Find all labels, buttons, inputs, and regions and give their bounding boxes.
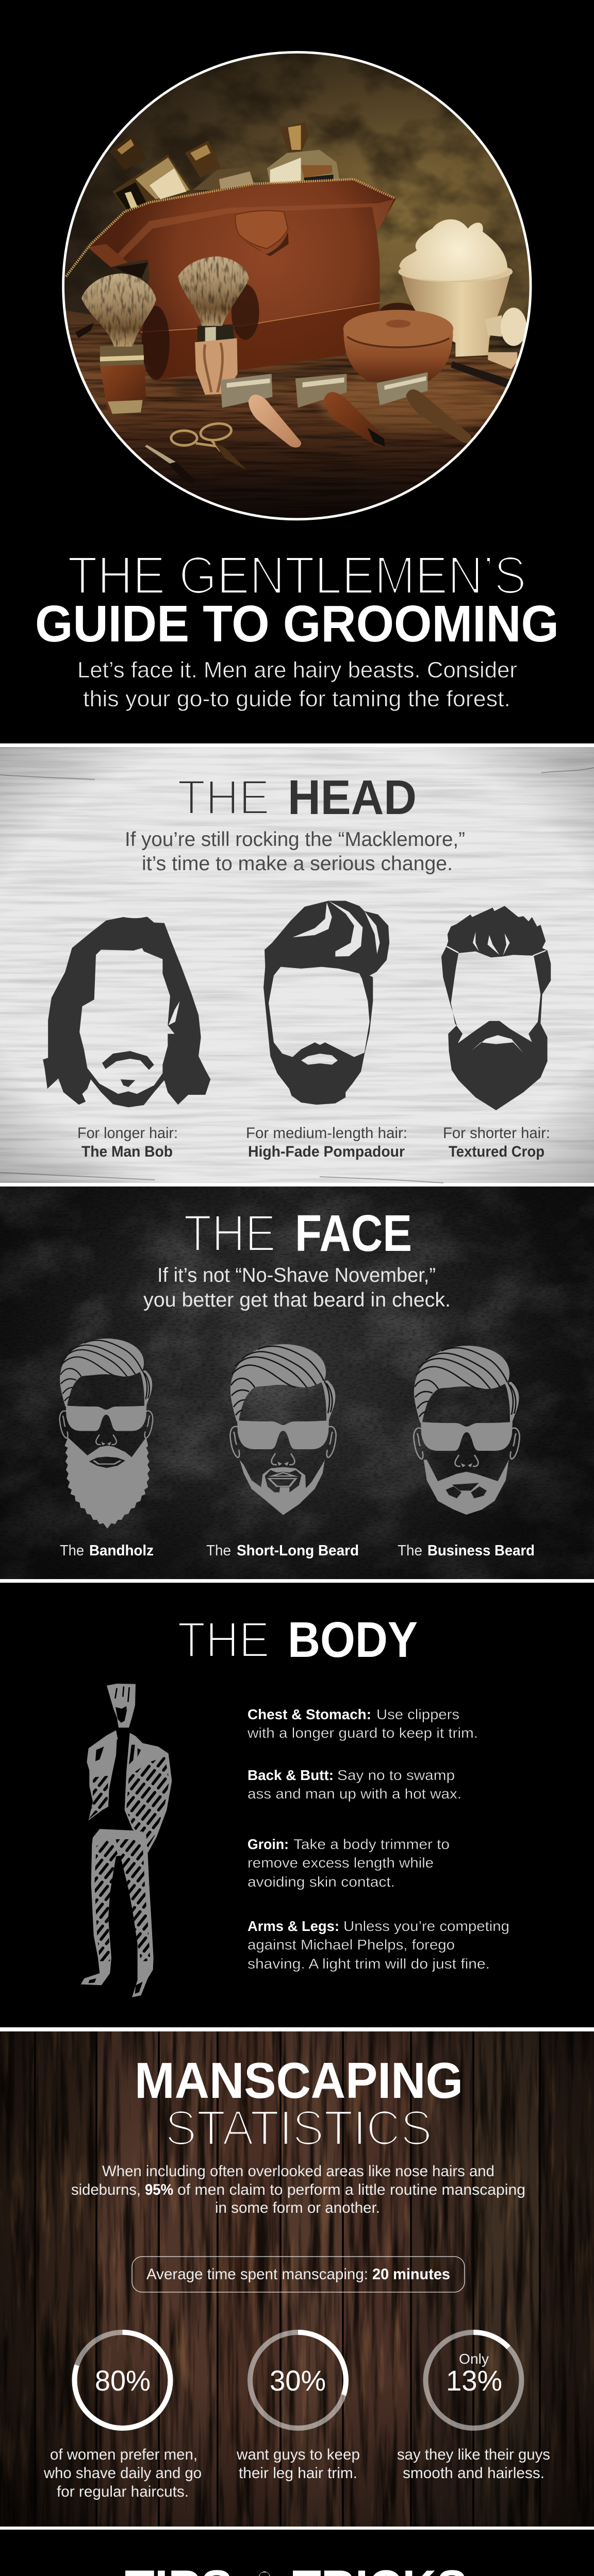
heading: the face: FACE bbox=[295, 1205, 412, 1262]
label: the short-long beard: Short-Long Beard bbox=[237, 1543, 359, 1559]
intro text bbox=[77, 657, 517, 711]
panel: header bbox=[35, 46, 559, 711]
tip: groin: Take a body trimmer to bbox=[293, 1836, 450, 1852]
heading: tips and tricks bbox=[125, 2560, 468, 2576]
straight razor bbox=[451, 361, 511, 387]
chalkboard background bbox=[0, 1187, 594, 1583]
tip: arms and legs: Unless you’re competing bbox=[343, 1918, 509, 1934]
tip: back and butt bbox=[248, 1767, 461, 1802]
light wood background bbox=[0, 743, 594, 1187]
shaving brush two bbox=[197, 325, 235, 342]
stat: 30 percent: their leg hair trim. bbox=[239, 2465, 357, 2482]
panel: the head bbox=[0, 743, 594, 1187]
tip: back and butt: Say no to swamp bbox=[337, 1767, 455, 1783]
tip: groin bbox=[248, 1836, 450, 1890]
illustration: the man bob bbox=[43, 917, 210, 1107]
illustration: the textured crop bbox=[441, 906, 551, 1110]
tip: groin: remove excess length while bbox=[248, 1855, 434, 1871]
heading: the face bbox=[184, 1205, 412, 1262]
label: high-fade pompadour: For medium-length hair: bbox=[246, 1125, 407, 1142]
tip: back and butt: Back & Butt: bbox=[248, 1767, 334, 1783]
bottles bbox=[109, 134, 146, 170]
stat: 80 percent: of women prefer men, bbox=[50, 2446, 197, 2463]
label: textured crop: For shorter hair: bbox=[443, 1125, 550, 1142]
illustration: sketched standing man bbox=[81, 1684, 172, 1997]
wooden soap bowl bbox=[343, 332, 453, 381]
paragraph: 95 percent of men: When including often overlooked areas like nose hairs and bbox=[102, 2163, 494, 2180]
label: textured crop bbox=[443, 1125, 550, 1160]
dark wood background bbox=[0, 2027, 594, 2530]
heading: the head: THE bbox=[177, 770, 270, 825]
illustration: the short-long beard bbox=[230, 1344, 336, 1515]
tip: chest and stomach bbox=[247, 1706, 478, 1741]
shaving bowl bbox=[380, 303, 416, 311]
intro text: Let’s face it. Men are hairy beasts. Consider bbox=[77, 657, 517, 683]
illustration: the pompadour bbox=[263, 901, 389, 1105]
tip: arms and legs: Arms & Legs: bbox=[248, 1918, 339, 1934]
tip: back and butt: ass and man up with a hot wax. bbox=[248, 1786, 461, 1802]
heading: manscaping statistics: MANSCAPING bbox=[135, 2052, 463, 2109]
stat: 13 percent: say they like their guys bbox=[397, 2446, 550, 2463]
label: high-fade pompadour bbox=[246, 1125, 407, 1160]
paragraph: 95 percent of men: 95% bbox=[145, 2181, 173, 2198]
paragraph: 95 percent of men bbox=[71, 2163, 525, 2216]
heading: the body: BODY bbox=[288, 1612, 418, 1668]
head intro text: If you’re still rocking the “Macklemore,” bbox=[125, 828, 465, 851]
heading: the body bbox=[177, 1612, 418, 1668]
stat: 13 percent: Only bbox=[459, 2351, 489, 2367]
label: the business beard: The bbox=[398, 1543, 422, 1559]
title: GUIDE TO GROOMING bbox=[35, 595, 559, 653]
face intro text: If it’s not “No-Shave November,” bbox=[157, 1264, 436, 1286]
title: THE GENTLEMEN’S bbox=[68, 546, 526, 605]
tip: arms and legs bbox=[248, 1918, 509, 1972]
heading: the head bbox=[177, 770, 417, 825]
panel: the face bbox=[0, 1187, 594, 1583]
callout: average time: Average time spent manscaping: bbox=[146, 2266, 368, 2283]
label: the bandholz: The bbox=[60, 1543, 84, 1559]
title bbox=[35, 546, 559, 653]
photo: grooming kit in a circular frame bbox=[57, 46, 539, 528]
stat: 30 percent: want guys to keep bbox=[236, 2446, 360, 2463]
paragraph: 95 percent of men: in some form or another. bbox=[215, 2199, 380, 2216]
panel: manscaping statistics bbox=[0, 2027, 594, 2530]
label: the bandholz bbox=[60, 1543, 154, 1559]
panel: tips and tricks bbox=[13, 2560, 581, 2576]
heading: manscaping statistics bbox=[135, 2052, 463, 2156]
label: the man bob: The Man Bob bbox=[81, 1143, 173, 1160]
leather bag bbox=[88, 180, 396, 379]
head intro text bbox=[125, 828, 465, 875]
heading: manscaping statistics: STATISTICS bbox=[165, 2100, 432, 2156]
tip: chest and stomach: with a longer guard to keep it trim. bbox=[247, 1725, 478, 1741]
heading: the face: THE bbox=[184, 1205, 276, 1262]
paragraph: 95 percent of men: sideburns, bbox=[71, 2181, 141, 2198]
callout: average time bbox=[132, 2257, 465, 2292]
head intro text: it’s time to make a serious change. bbox=[142, 853, 453, 875]
illustration: the business beard bbox=[414, 1346, 520, 1515]
illustration: the bandholz bbox=[60, 1338, 153, 1529]
tip: arms and legs: against Michael Phelps, forego bbox=[248, 1937, 455, 1953]
label: the man bob: For longer hair: bbox=[77, 1125, 178, 1142]
scissors bbox=[171, 422, 233, 451]
stat: 80 percent: who shave daily and go bbox=[43, 2465, 202, 2482]
tip: arms and legs: shaving. A light trim will do just fine. bbox=[248, 1956, 490, 1972]
stat: 80 percent: 80% bbox=[95, 2364, 151, 2397]
label: high-fade pompadour: High-Fade Pompadour bbox=[248, 1143, 405, 1160]
label: the man bob bbox=[77, 1125, 178, 1160]
label: textured crop: Textured Crop bbox=[449, 1143, 544, 1160]
shaving brush one bbox=[100, 345, 144, 366]
stat: 80 percent bbox=[43, 2332, 202, 2500]
heading: the body: THE bbox=[177, 1612, 270, 1668]
tip: chest and stomach: Use clippers bbox=[376, 1706, 459, 1722]
panel: the body bbox=[81, 1612, 509, 1997]
safety razors bbox=[221, 374, 272, 408]
tip: chest and stomach: Chest & Stomach: bbox=[248, 1706, 371, 1722]
stat: 30 percent bbox=[236, 2332, 360, 2482]
paragraph: 95 percent of men: of men claim to perform a little routine manscaping bbox=[177, 2181, 525, 2198]
intro text: this your go-to guide for taming the forest. bbox=[83, 686, 510, 711]
label: the short-long beard: The bbox=[206, 1543, 231, 1559]
stat: 13 percent bbox=[397, 2332, 550, 2482]
nail file bbox=[145, 445, 176, 465]
label: the business beard: Business Beard bbox=[427, 1543, 535, 1559]
stat: 30 percent: 30% bbox=[270, 2364, 326, 2397]
tip: groin: avoiding skin contact. bbox=[248, 1874, 395, 1890]
heading: the head: HEAD bbox=[288, 770, 417, 825]
stat: 80 percent: for regular haircuts. bbox=[57, 2483, 189, 2500]
brush shadows bbox=[142, 306, 170, 380]
callout: average time: 20 minutes bbox=[372, 2266, 450, 2283]
face intro text: you better get that beard in check. bbox=[143, 1289, 451, 1311]
tip: groin: Groin: bbox=[248, 1836, 289, 1852]
shadow behind bag bbox=[140, 306, 427, 392]
stat: 13 percent: 13% bbox=[446, 2364, 502, 2397]
label: the bandholz: Bandholz bbox=[89, 1543, 154, 1559]
face intro text bbox=[143, 1264, 451, 1311]
stat: 13 percent: smooth and hairless. bbox=[403, 2465, 544, 2482]
